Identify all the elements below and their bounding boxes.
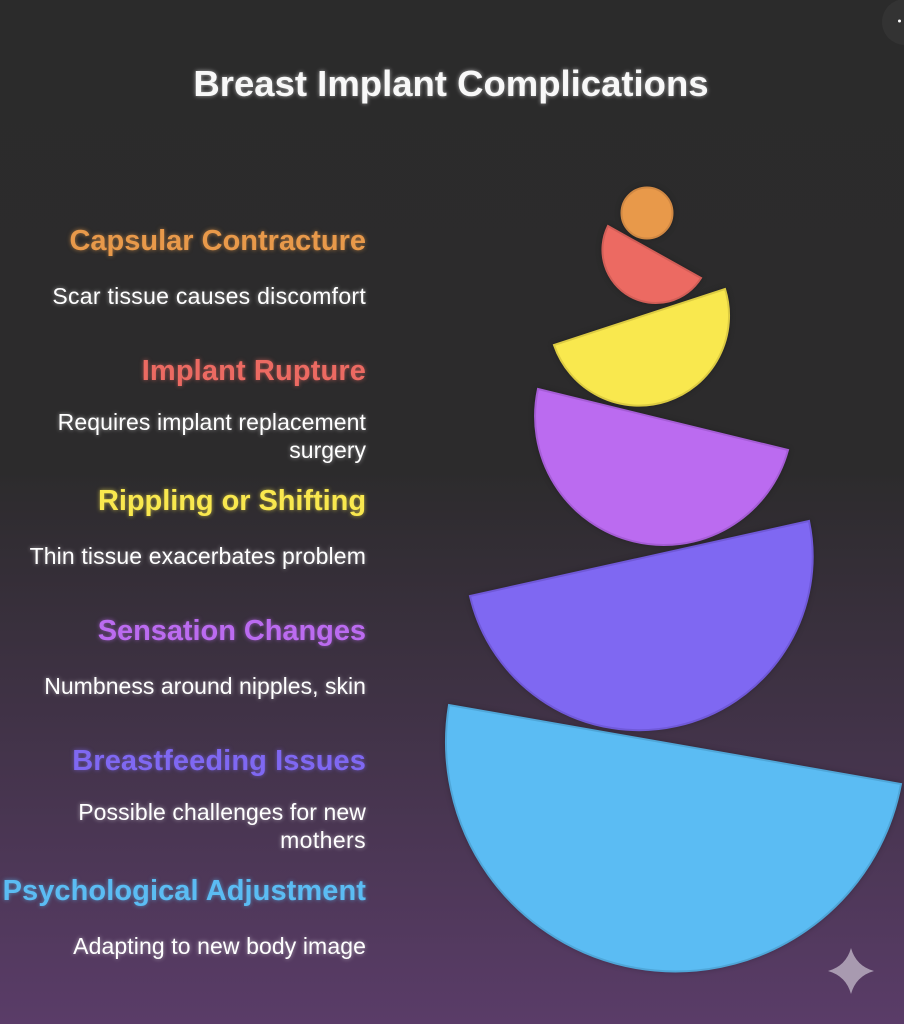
text: Breastfeeding Issues description: mothers xyxy=(280,827,366,853)
text: Capsular Contracture description: Scar tissue causes discomfort xyxy=(52,283,366,309)
text: Rippling or Shifting description: Thin tissue exacerbates problem xyxy=(30,543,366,569)
text: Implant Rupture description xyxy=(56,409,368,466)
shape: orange circle (Capsular Contracture) xyxy=(622,188,672,238)
shape: purple bowl (Sensation Changes) xyxy=(535,389,788,545)
heading: Implant Rupture: Implant Rupture xyxy=(142,355,366,387)
shape: yellow bowl (Rippling or Shifting) xyxy=(554,289,729,406)
text: Breastfeeding Issues description xyxy=(77,799,368,853)
heading: Sensation Changes: Sensation Changes xyxy=(98,615,366,647)
text: Sensation Changes description: Numbness around nipples, skin xyxy=(44,673,366,699)
title: Breast Implant Complications xyxy=(193,63,709,104)
text: Implant Rupture description: Requires implant replacement xyxy=(58,409,366,435)
shape: red bowl (Implant Rupture) xyxy=(602,226,701,303)
heading: Psychological Adjustment: Psychological Adjustment xyxy=(3,875,366,907)
text: Breastfeeding Issues description: Possible challenges for new xyxy=(78,799,366,825)
text: Implant Rupture description: surgery xyxy=(289,437,366,463)
heading: Capsular Contracture: Capsular Contracture xyxy=(69,225,366,257)
heading: Rippling or Shifting: Rippling or Shifting xyxy=(98,485,366,517)
shape: violet bowl (Breastfeeding Issues) xyxy=(470,521,813,730)
text: Psychological Adjustment description: Adapting to new body image xyxy=(73,933,366,959)
shape: blue bowl (Psychological Adjustment) xyxy=(446,705,901,971)
heading: Breastfeeding Issues: Breastfeeding Issues xyxy=(72,745,366,777)
